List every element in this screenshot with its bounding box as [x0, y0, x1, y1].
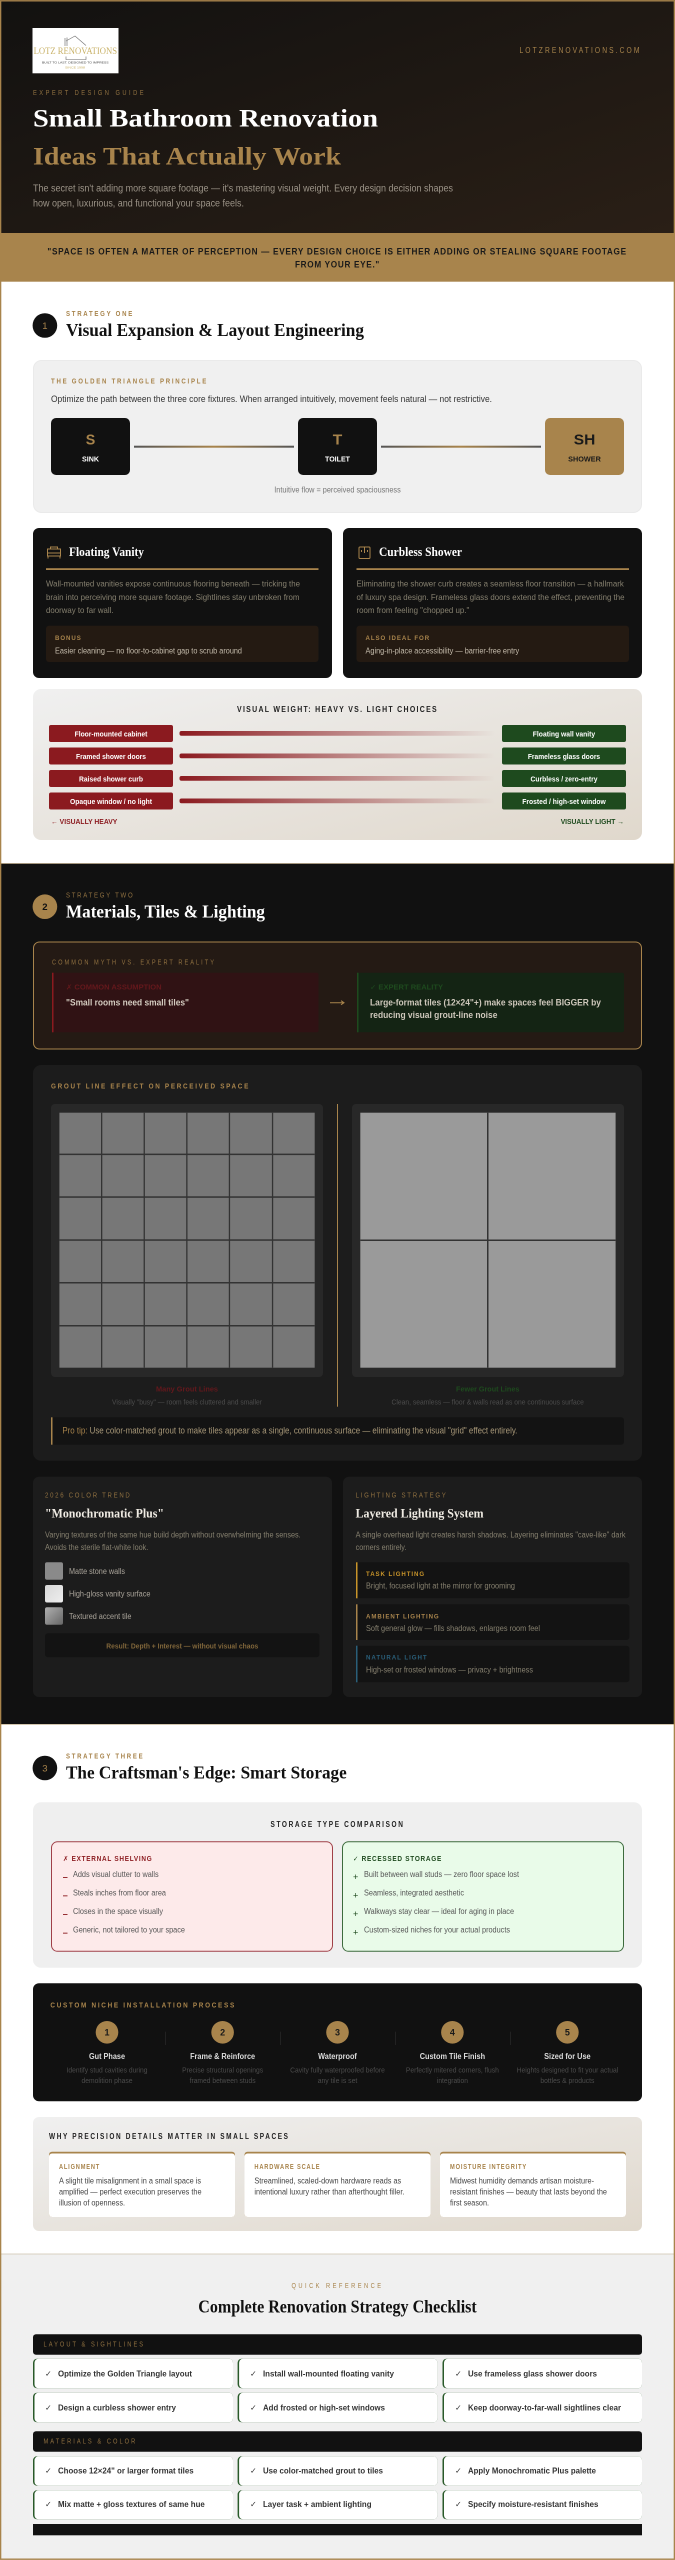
description: A single overhead light creates harsh shadows. Layering eliminates "cave-like" dark [356, 1531, 627, 1540]
section 2 heading [33, 892, 265, 921]
panel: floating vanity [33, 528, 332, 678]
swatch: matte [45, 1562, 125, 1580]
divider [337, 1104, 338, 1407]
checklist item [33, 2490, 233, 2519]
checklist item: Apply Monochromatic Plus palette [468, 2465, 596, 2475]
description [45, 1531, 301, 1552]
step 3: Waterproof [318, 2052, 357, 2061]
checklist item: ✓ [250, 2370, 257, 2379]
section: checklist [0, 2254, 675, 2560]
logo: LOTZ RENOVATIONS [34, 47, 117, 57]
checklist item [238, 2359, 437, 2388]
card: hardware scale: intentional luxury rather than afterthought filler. [254, 2188, 404, 2196]
card: hardware scale: HARDWARE SCALE [254, 2164, 320, 2171]
description: corners entirely. [356, 1543, 406, 1552]
panel: myth vs reality [34, 942, 642, 1049]
intro text: how open, luxurious, and functional your space feels. [33, 198, 244, 209]
description: Varying textures of the same hue build depth without overwhelming the senses. [45, 1531, 301, 1540]
panel: golden triangle: Optimize the path between the three core fixtures. When arranged intuitively, movement feels natural — not restrictive. [51, 394, 492, 405]
ambient lighting [356, 1604, 629, 1640]
row 3: Raised shower curb [79, 774, 143, 783]
checklist item: Keep doorway-to-far-wall sightlines clear [468, 2402, 622, 2412]
section 3 heading: STRATEGY THREE [66, 1754, 144, 1760]
checklist item: Optimize the Golden Triangle layout [58, 2369, 192, 2379]
myth box: ✗ COMMON ASSUMPTION [66, 984, 162, 992]
panel: curbless shower [343, 528, 642, 678]
panel: precision details: WHY PRECISION DETAILS MATTER IN SMALL SPACES [49, 2132, 290, 2141]
row 2: Frameless glass doors [528, 752, 600, 761]
row 1: Floating wall vanity [533, 729, 596, 738]
task lighting: Bright, focused light at the mirror for grooming [366, 1582, 515, 1591]
icon: vanity [48, 547, 60, 558]
checklist eyebrow: QUICK REFERENCE [292, 2283, 384, 2290]
quote band [0, 233, 675, 282]
checklist item [238, 2393, 437, 2422]
arrow [330, 1001, 344, 1005]
recessed storage: Custom-sized niches for your actual products [364, 1926, 510, 1935]
connector [134, 446, 294, 448]
step 1: Identify stud cavities during [66, 2068, 148, 2075]
fixture: toilet: TOILET [325, 456, 351, 464]
panel: monochromatic plus [33, 1477, 332, 1697]
body text: room from feeling "chopped up." [356, 605, 469, 615]
task lighting [356, 1562, 629, 1598]
natural light [356, 1646, 629, 1682]
checklist item: ✓ [45, 2466, 52, 2475]
step 1: 1 [104, 2028, 110, 2038]
checklist item: Specify moisture-resistant finishes [468, 2499, 599, 2509]
swatch: matte: Matte stone walls [69, 1567, 125, 1576]
checklist item [33, 2359, 233, 2388]
step 1: Gut Phase [89, 2052, 125, 2061]
intro text: The secret isn't adding more square footage — it's mastering visual weight. Every design decision shapes [33, 184, 453, 195]
panel: visual weight: VISUAL WEIGHT: HEAVY VS. LIGHT CHOICES [237, 705, 438, 714]
panel: visual weight [33, 689, 642, 840]
recessed storage: + [353, 1872, 358, 1882]
step 2 [182, 2021, 264, 2085]
fixture: toilet [298, 418, 377, 475]
category bar: layout: LAYOUT & SIGHTLINES [44, 2342, 145, 2349]
section 1 heading: STRATEGY ONE [66, 311, 134, 318]
step 1 [66, 2021, 148, 2085]
also ideal box: ALSO IDEAL FOR [366, 635, 430, 642]
bonus box: Easier cleaning — no floor-to-cabinet gap to scrub around [55, 646, 242, 655]
card: moisture integrity [440, 2152, 626, 2217]
external shelving: Adds visual clutter to walls [73, 1870, 159, 1879]
step 2: Precise structural openings [182, 2068, 264, 2075]
step 3 [290, 2021, 385, 2085]
body text [46, 579, 300, 615]
checklist item [33, 2393, 233, 2422]
step 2: framed between studs [190, 2078, 256, 2085]
body text: Eliminating the shower curb creates a seamless floor transition — a hallmark [356, 579, 624, 589]
fixture: toilet: T [333, 432, 342, 448]
step 3: 3 [335, 2028, 340, 2038]
also ideal box [356, 626, 629, 662]
step 4: integration [437, 2078, 468, 2085]
caption: fewer [392, 1385, 584, 1407]
reality box: Large-format tiles (12×24"+) make spaces feel BIGGER by [370, 998, 602, 1008]
badge 2 [33, 894, 57, 919]
panel: storage comparison: STORAGE TYPE COMPARISON [270, 1820, 404, 1829]
step 4 [406, 2021, 499, 2085]
section 2 heading: Materials, Tiles & Lighting [66, 901, 265, 921]
checklist item: Mix matte + gloss textures of same hue [58, 2499, 205, 2509]
step 3: Cavity fully waterproofed before [290, 2068, 385, 2075]
recessed storage: + [353, 1890, 358, 1900]
checklist item: ✓ [250, 2500, 257, 2509]
bonus box [46, 626, 318, 662]
quote band: FROM YOUR EYE." [295, 260, 380, 271]
panel: golden triangle [34, 360, 642, 512]
caption: Intuitive flow = perceived spaciousness [274, 486, 401, 495]
panel: curbless shower: Curbless Shower [379, 545, 462, 559]
panel: grout line effect: GROUT LINE EFFECT ON PERCEIVED SPACE [51, 1082, 250, 1091]
body text: brain into perceiving more square footage. Sightlines stay unbroken from [46, 592, 300, 602]
badge 3: 3 [42, 1764, 48, 1774]
external shelving: Steals inches from floor area [73, 1888, 166, 1897]
checklist item: Add frosted or high-set windows [263, 2402, 385, 2412]
section 1 heading: Visual Expansion & Layout Engineering [66, 320, 364, 340]
checklist item [442, 2490, 642, 2519]
panel: golden triangle: THE GOLDEN TRIANGLE PRINCIPLE [51, 378, 208, 385]
checklist item: Design a curbless shower entry [58, 2402, 176, 2412]
also ideal box: Aging-in-place accessibility — barrier-free entry [366, 646, 519, 655]
tile grid: fewer grout lines [352, 1104, 624, 1377]
checklist item: ✓ [45, 2403, 52, 2412]
recessed storage: ✓ RECESSED STORAGE [353, 1856, 442, 1863]
step 5: 5 [565, 2028, 570, 2038]
row 1: Floor-mounted cabinet [75, 729, 148, 738]
row 4: Opaque window / no light [70, 797, 152, 806]
panel: floating vanity: Floating Vanity [69, 545, 145, 559]
card: moisture integrity: first season. [450, 2198, 489, 2208]
reality box: ✓ EXPERT REALITY [370, 985, 443, 992]
step 4: 4 [450, 2028, 455, 2038]
checklist item: ✓ [455, 2466, 462, 2475]
step 2: 2 [220, 2028, 225, 2038]
eyebrow: EXPERT DESIGN GUIDE [33, 90, 146, 97]
section 1 heading [33, 311, 364, 340]
checklist item [442, 2393, 642, 2422]
step 5: bottles & products [540, 2078, 595, 2085]
row 3: Curbless / zero-entry [530, 774, 598, 783]
checklist item: ✓ [250, 2403, 257, 2412]
checklist item [238, 2456, 437, 2486]
header panel [0, 0, 675, 233]
checklist item: Use color-matched grout to tiles [263, 2465, 383, 2475]
card: alignment [49, 2152, 235, 2217]
swatch: textured [45, 1607, 132, 1625]
swatch: textured: Textured accent tile [69, 1612, 132, 1621]
fixture: sink [51, 418, 130, 475]
panel: layered lighting [343, 1477, 642, 1697]
caption: fewer: Fewer Grout Lines [456, 1385, 519, 1394]
legend: heavy: ← VISUALLY HEAVY [51, 819, 118, 826]
panel: monochromatic plus: 2026 COLOR TREND [45, 1492, 132, 1500]
title line 2: Ideas That Actually Work [33, 141, 342, 170]
checklist item [442, 2456, 642, 2486]
checklist item: ✓ [45, 2370, 52, 2379]
step 1: demolition phase [82, 2078, 133, 2085]
checklist title: Complete Renovation Strategy Checklist [198, 2297, 477, 2317]
recessed storage: Walkways stay clear — ideal for aging in place [364, 1907, 514, 1916]
description [356, 1531, 627, 1552]
card: moisture integrity: resistant finishes — beauty that lasts beyond the [450, 2188, 607, 2196]
reality box [357, 973, 624, 1032]
checklist item [238, 2490, 437, 2519]
section 3 heading [33, 1754, 347, 1782]
myth box: "Small rooms need small tiles" [66, 998, 189, 1008]
card: alignment: ALIGNMENT [59, 2164, 100, 2171]
recessed storage: + [353, 1909, 358, 1919]
fixture: sink: S [86, 432, 95, 448]
swatch: gloss [45, 1585, 151, 1602]
badge 1 [33, 313, 57, 338]
task lighting: TASK LIGHTING [366, 1571, 425, 1578]
recessed storage: + [353, 1928, 358, 1938]
panel: grout line effect [33, 1065, 642, 1461]
title line 1: Small Bathroom Renovation [33, 104, 378, 133]
icon: shower [359, 547, 370, 558]
ambient lighting: AMBIENT LIGHTING [366, 1613, 440, 1620]
fixture: sink: SINK [82, 456, 99, 464]
step 2: Frame & Reinforce [190, 2052, 256, 2061]
fixture: shower [545, 418, 624, 475]
card: hardware scale: Streamlined, scaled-down hardware reads as [254, 2177, 401, 2186]
card: hardware scale [244, 2152, 430, 2217]
checklist item [33, 2456, 233, 2486]
row 1 [49, 725, 626, 742]
natural light: NATURAL LIGHT [366, 1655, 428, 1662]
description: Avoids the sterile flat-white look. [45, 1543, 148, 1552]
external shelving: Closes in the space visually [73, 1907, 163, 1916]
category bar: layout [33, 2334, 642, 2355]
checklist item: ✓ [455, 2370, 462, 2379]
row 4: Frosted / high-set window [522, 797, 606, 806]
logo [32, 28, 118, 73]
checklist item: Install wall-mounted floating vanity [263, 2369, 394, 2379]
card: alignment: A slight tile misalignment in a small space is [59, 2177, 201, 2186]
reality box: reducing visual grout-line noise [370, 1010, 497, 1021]
external shelving: ✗ EXTERNAL SHELVING [63, 1855, 152, 1863]
category bar: truncated [33, 2524, 642, 2535]
checklist item: ✓ [455, 2500, 462, 2509]
card: moisture integrity: Midwest humidity demands artisan moisture- [450, 2177, 594, 2186]
panel: layered lighting: Layered Lighting System [356, 1506, 484, 1520]
section 3 heading: The Craftsman's Edge: Smart Storage [66, 1762, 347, 1782]
row 4 [49, 792, 626, 810]
card: alignment: illusion of openness. [59, 2198, 125, 2208]
section 2 background [0, 863, 675, 1724]
checklist item [442, 2359, 642, 2388]
step 4: Custom Tile Finish [420, 2052, 485, 2061]
recessed storage [342, 1842, 624, 1951]
intro text [33, 184, 453, 209]
panel: precision details [33, 2117, 642, 2231]
row 2: Framed shower doors [76, 752, 146, 761]
caption: many [112, 1385, 263, 1407]
myth box [52, 973, 318, 1032]
panel: niche installation process [33, 1983, 642, 2101]
row 3 [49, 770, 626, 787]
panel: myth vs reality: COMMON MYTH VS. EXPERT REALITY [52, 959, 216, 966]
ambient lighting: Soft general glow — fills shadows, enlarges room feel [366, 1624, 540, 1633]
body text [356, 579, 625, 615]
step 3: any tile is set [318, 2078, 357, 2085]
caption: many: Many Grout Lines [156, 1385, 218, 1394]
checklist item: Use frameless glass shower doors [468, 2369, 597, 2379]
fixture: shower: SH [574, 432, 595, 448]
recessed storage: Seamless, integrated aesthetic [364, 1888, 464, 1897]
panel: storage comparison [33, 1802, 642, 1968]
natural light: High-set or frosted windows — privacy + brightness [366, 1666, 533, 1675]
pro tip: Pro tip: Use color-matched grout to make tiles appear as a single, continuous surface — eliminating the visual "grid" effect entirely. [62, 1426, 517, 1436]
checklist item: ✓ [250, 2466, 257, 2475]
category bar: materials [33, 2431, 642, 2452]
step 5: Heights designed to fit your actual [517, 2068, 619, 2075]
category bar: materials: MATERIALS & COLOR [44, 2438, 137, 2445]
body text: doorway to far wall. [46, 605, 114, 615]
section 2 heading: STRATEGY TWO [66, 892, 134, 900]
badge 2: 2 [42, 902, 48, 913]
checklist item: Choose 12×24" or larger format tiles [58, 2465, 194, 2475]
pro tip [51, 1417, 624, 1445]
card: moisture integrity: MOISTURE INTEGRITY [450, 2164, 527, 2171]
external shelving: Generic, not tailored to your space [73, 1926, 185, 1935]
step 4: Perfectly mitered corners, flush [406, 2068, 499, 2075]
bonus box: BONUS [55, 635, 82, 642]
connector [381, 446, 541, 448]
card: alignment: amplified — perfect execution preserves the [59, 2188, 202, 2196]
logo: BUILT TO LAST. DESIGNED TO IMPRESS [42, 61, 109, 65]
tile grid: many grout lines [51, 1104, 323, 1377]
caption: fewer: Clean, seamless — floor & walls read as one continuous surface [392, 1400, 584, 1407]
result box: Result: Depth + Interest — without visual chaos [106, 1644, 258, 1651]
result box [45, 1633, 320, 1657]
badge 1: 1 [42, 321, 48, 332]
body text: Wall-mounted vanities expose continuous flooring beneath — tricking the [46, 579, 300, 589]
external shelving [52, 1842, 332, 1951]
panel: niche installation process: CUSTOM NICHE INSTALLATION PROCESS [50, 2000, 236, 2010]
panel: layered lighting: LIGHTING STRATEGY [356, 1492, 448, 1500]
logo: SINCE 1998 [65, 65, 86, 69]
panel: monochromatic plus: "Monochromatic Plus" [45, 1506, 164, 1520]
fixture: shower: SHOWER [568, 456, 601, 464]
badge 3 [33, 1756, 57, 1780]
checklist item: ✓ [45, 2500, 52, 2509]
checklist item: ✓ [455, 2403, 462, 2412]
step 5: Sized for Use [544, 2052, 591, 2061]
website url: LOTZRENOVATIONS.COM [520, 46, 642, 55]
body text: of luxury spa design. Frameless glass doors extend the effect, preventing the [356, 592, 625, 602]
checklist item: Layer task + ambient lighting [263, 2499, 372, 2509]
row 2 [49, 748, 626, 764]
step 5 [517, 2021, 619, 2085]
swatch: gloss: High-gloss vanity surface [69, 1589, 151, 1598]
legend: light: VISUALLY LIGHT → [561, 819, 624, 826]
caption: many: Visually "busy" — room feels cluttered and smaller [112, 1400, 263, 1407]
recessed storage: Built between wall studs — zero floor space lost [364, 1870, 520, 1879]
